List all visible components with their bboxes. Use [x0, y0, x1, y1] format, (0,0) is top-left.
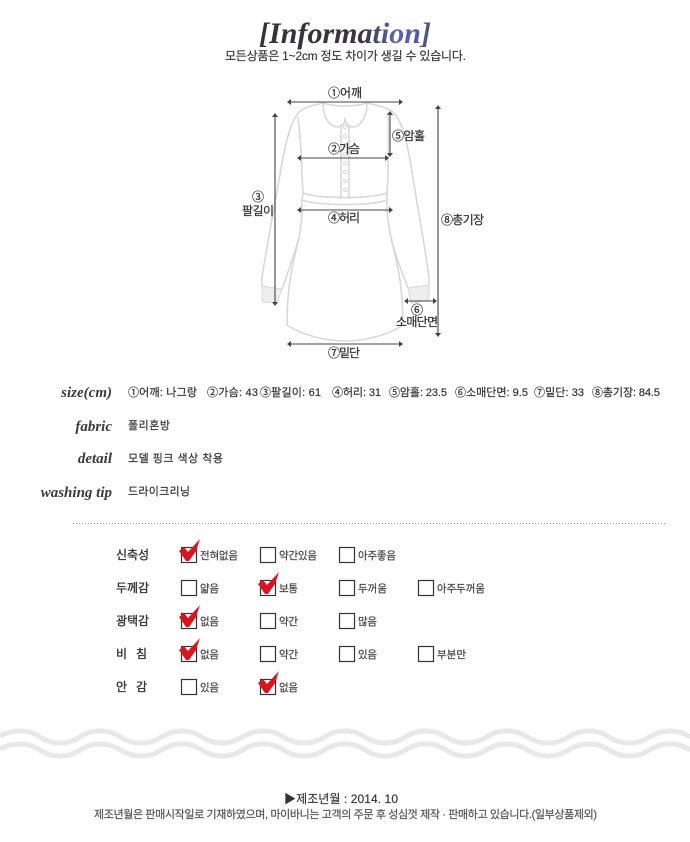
arrow: hem: [287, 341, 403, 347]
wave divider: [0, 731, 690, 756]
icon: red check: [258, 671, 279, 693]
row: gloss: 광택감: [116, 614, 149, 628]
label: hem: ⑦밑단: [328, 346, 360, 360]
row: gloss: 약간: [279, 616, 298, 628]
row: sheerness: 없음: [200, 648, 219, 661]
row: fabric: fabric: [75, 419, 112, 435]
row: detail: 모델 핑크 색상 착용: [128, 452, 223, 465]
garment measurement diagram: [242, 86, 484, 360]
row: size: ⑤암홀: 23.5: [389, 386, 447, 399]
row: lining: 안: [116, 680, 127, 694]
label: sleeve length: [242, 190, 274, 218]
row: size: ⑥소매단면: 9.5: [455, 386, 528, 399]
label: cuff: ⑥: [411, 303, 423, 317]
row: thickness: [116, 572, 485, 596]
row: sheerness: 있음: [358, 649, 377, 661]
row: lining: 없음: [279, 681, 298, 694]
row: sheerness: 부분만: [437, 649, 466, 661]
row: lining: 있음: [200, 682, 219, 694]
row: gloss: 많음: [358, 616, 377, 628]
row: size: ③팔길이: 61: [260, 386, 321, 399]
row: thickness: 두꺼움: [358, 583, 387, 595]
row: stretch: 약간있음: [279, 550, 317, 562]
row: thickness: 아주두꺼움: [437, 583, 485, 595]
row: stretch: [116, 539, 396, 562]
row: lining: 감: [136, 680, 147, 694]
arrow: chest: [297, 155, 389, 161]
icon: red check: [258, 572, 279, 594]
row: washing tip: washing tip: [41, 485, 112, 501]
fabric property checklist: [116, 539, 485, 694]
row: size: [60, 385, 660, 401]
arrow: armhole: [387, 111, 393, 157]
row: thickness: 얇음: [200, 582, 219, 595]
arrow: cuff: [404, 298, 437, 304]
row: thickness: 보통: [279, 583, 298, 595]
row: sheerness: [116, 638, 466, 662]
row: detail: [78, 451, 223, 467]
row: size: ①어깨: 나그랑: [128, 386, 197, 399]
label: waist: ④허리: [328, 211, 360, 225]
dress outline: [262, 103, 429, 341]
title: [Information]: [259, 17, 431, 50]
arrow: total length: [435, 105, 441, 337]
row: sheerness: 약간: [279, 649, 298, 661]
row: sheerness: 침: [136, 647, 147, 661]
row: lining: [116, 671, 298, 694]
label: chest: ②가슴: [328, 142, 360, 156]
row: gloss: [116, 605, 377, 628]
row: stretch: 신축성: [116, 548, 149, 562]
footer: note: 제조년월은 판매시작일로 기재하였으며, 마이바니는 고객의 주문 후 성심껏 제작 · 판매하고 있습니다.(일부상품제외): [94, 807, 597, 821]
row: fabric: 폴리혼방: [128, 419, 170, 432]
row: fabric: [75, 419, 170, 435]
row: washing tip: [41, 485, 190, 501]
footer: manufacture date: ▶제조년월 : 2014. 10: [284, 792, 398, 806]
label: armhole: ⑤암홀: [392, 129, 425, 143]
arrow: waist: [297, 207, 393, 213]
row: size: ②가슴: 43: [207, 386, 258, 399]
spec table: [41, 385, 660, 501]
row: sheerness: 비: [116, 647, 127, 661]
icon: red check: [179, 605, 200, 627]
label: sleeve length: 팔길이: [242, 204, 274, 218]
row: stretch: 전혀없음: [200, 549, 238, 562]
row: washing tip: 드라이크리닝: [128, 485, 190, 498]
label: shoulder: ①어깨: [328, 86, 362, 100]
icon: red check: [179, 539, 200, 561]
label: cuff: 소매단면: [396, 315, 438, 329]
row: size: ④허리: 31: [332, 386, 381, 399]
row: gloss: 없음: [200, 615, 219, 628]
label: cuff: [396, 303, 438, 329]
label: total length: ⑧총기장: [441, 213, 484, 227]
row: size: size(cm): [60, 385, 112, 401]
arrow: shoulder: [287, 99, 403, 105]
row: size: ⑦밑단: 33: [534, 386, 584, 399]
row: detail: detail: [78, 451, 113, 467]
arrow: sleeve length: [272, 113, 278, 306]
label: sleeve length: ③: [252, 190, 264, 204]
row: stretch: 아주좋음: [358, 550, 396, 562]
row: size: ⑧총기장: 84.5: [592, 386, 660, 399]
subtitle: 모든상품은 1~2cm 정도 차이가 생길 수 있습니다.: [225, 49, 466, 63]
icon: red check: [179, 638, 200, 660]
row: thickness: 두께감: [116, 581, 149, 595]
